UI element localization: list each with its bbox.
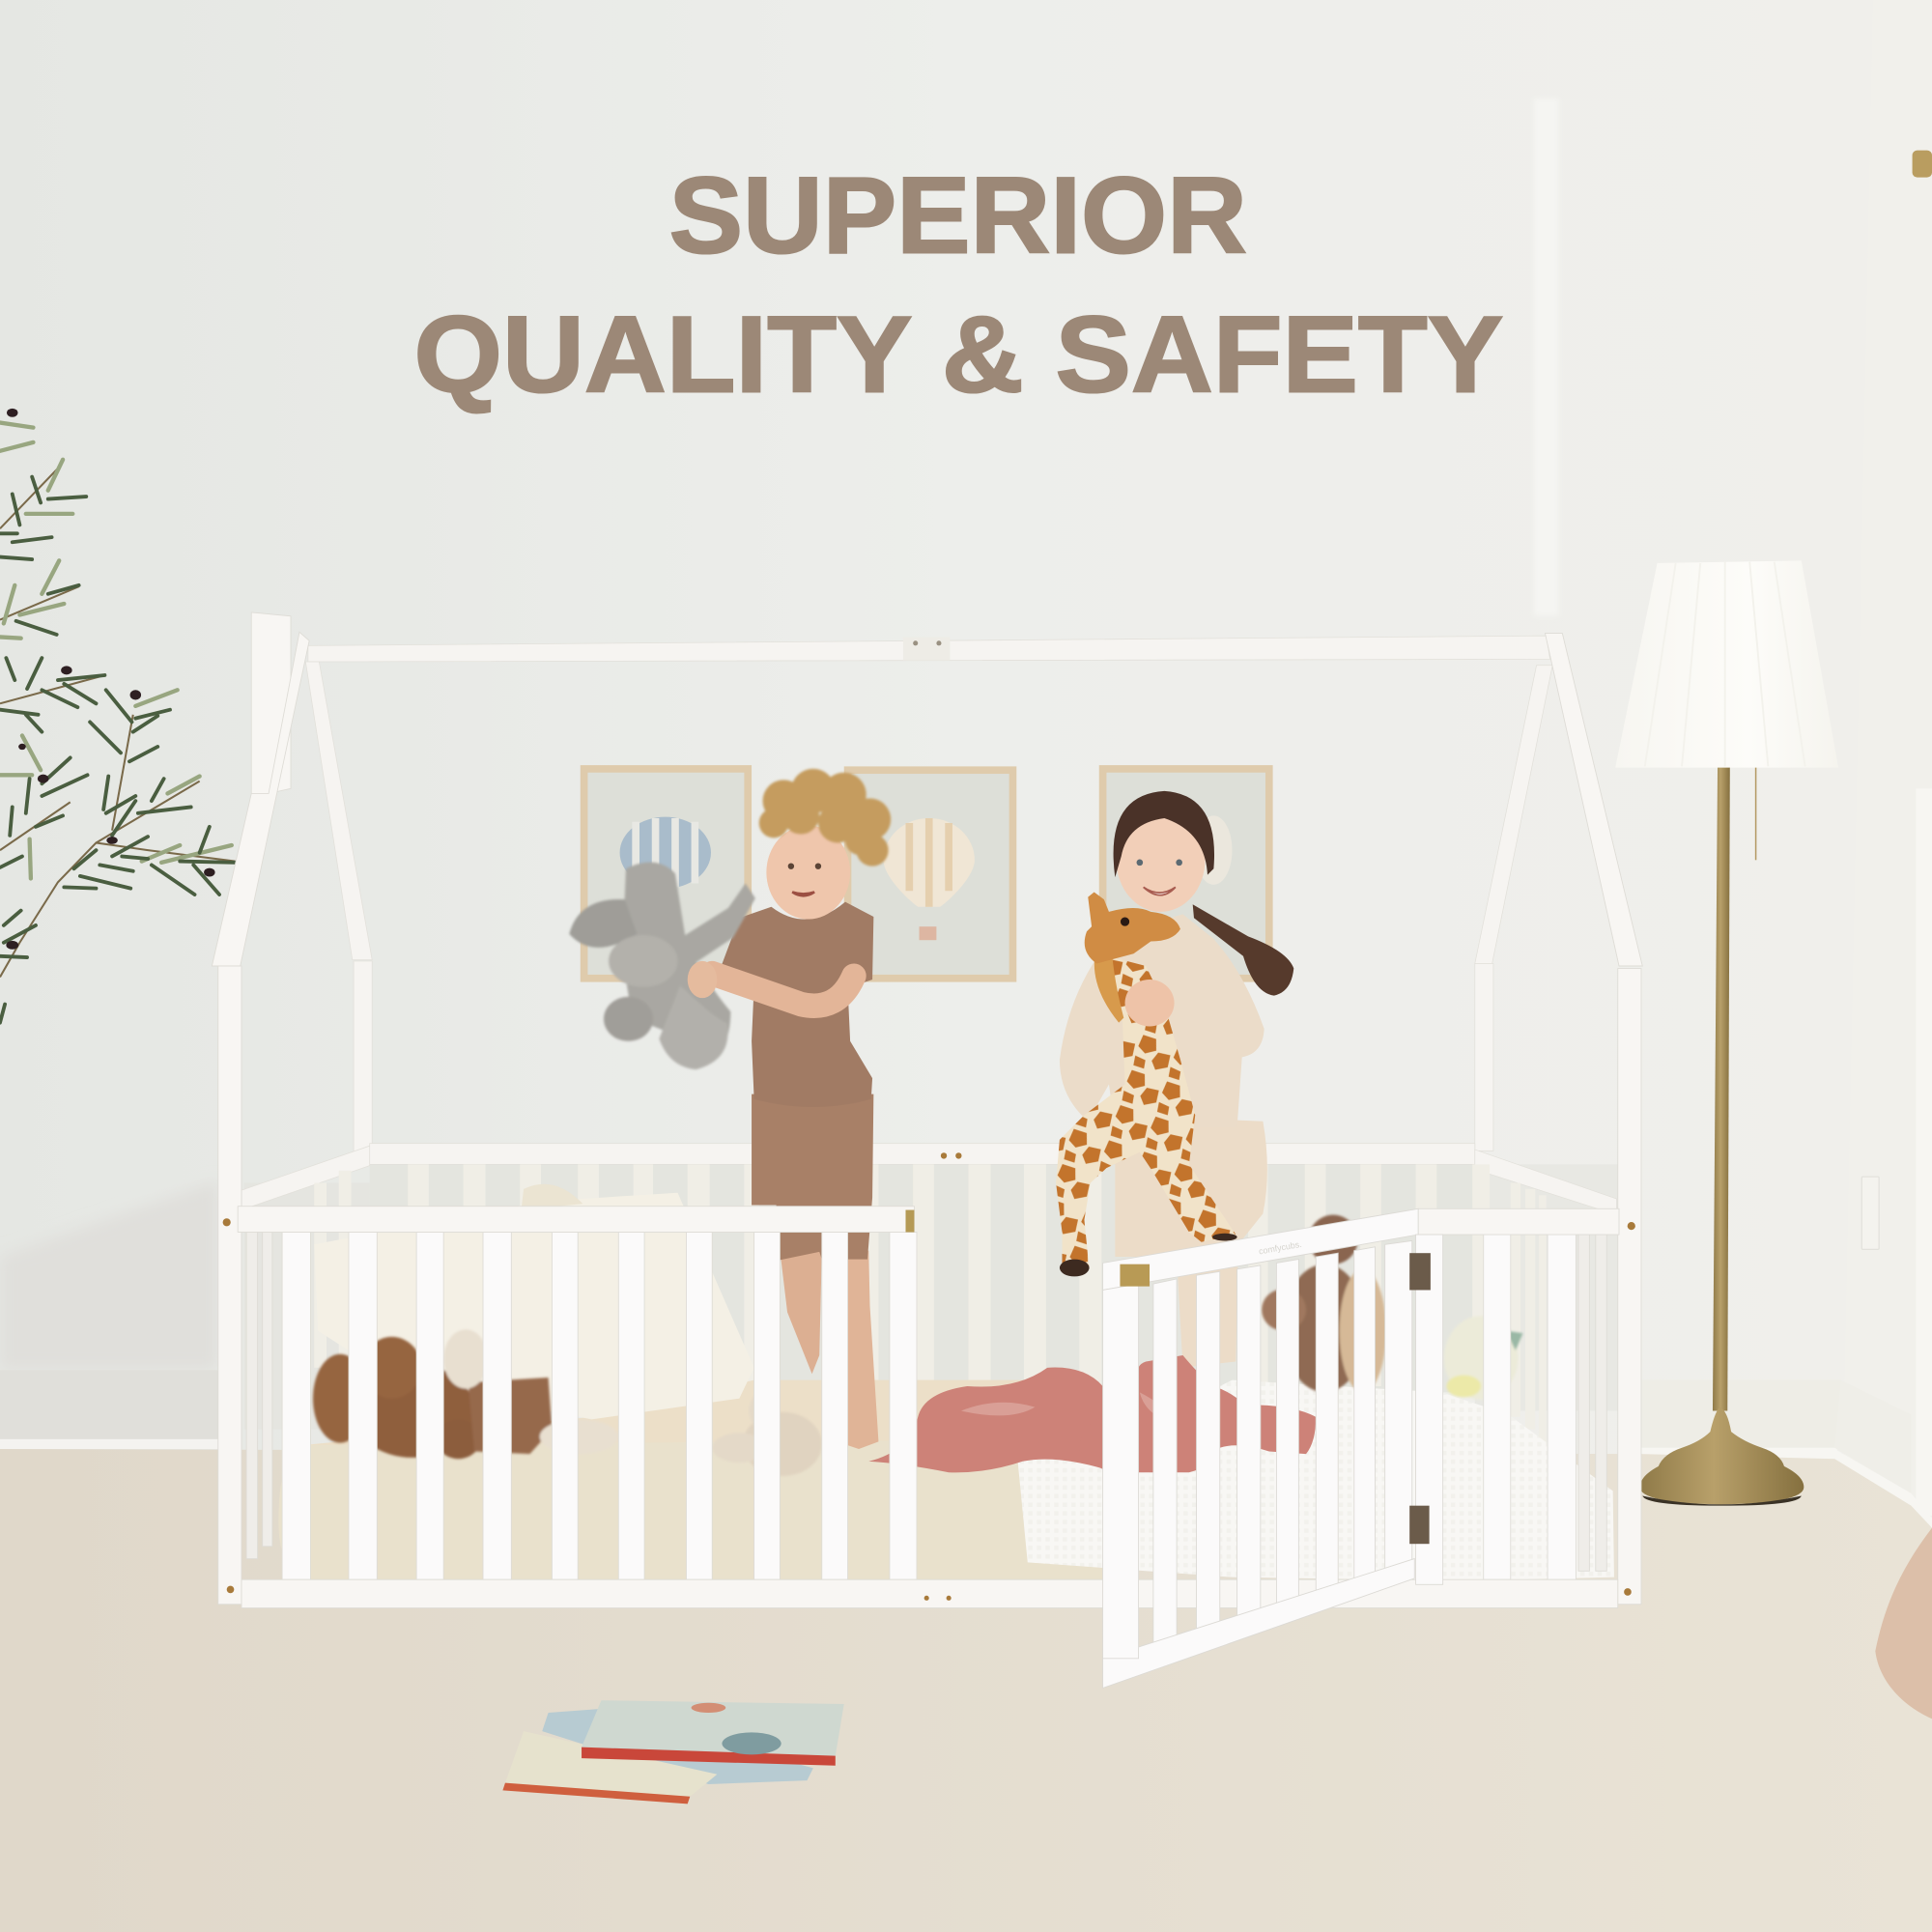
gate latch: [1120, 1264, 1150, 1287]
lamp shade: [1615, 560, 1838, 768]
ridge connector hardware: [903, 637, 950, 661]
boy curly hair: [759, 769, 891, 867]
books on floor: [502, 1700, 844, 1804]
girl: [1060, 791, 1293, 1368]
rail hardware: brass bolts and latches: [223, 640, 1635, 1601]
boy arm: [712, 974, 854, 1006]
girl head: [1117, 809, 1205, 912]
book: top: [582, 1700, 844, 1766]
lamp pull chain: [1755, 766, 1757, 860]
title line 2: QUALITY & SAFETY: [414, 294, 1503, 415]
toy: teddies right: [1262, 1215, 1523, 1400]
throw blanket corner: [1875, 1528, 1932, 1719]
front right post: [1618, 969, 1641, 1605]
ridge beam: [308, 636, 1550, 662]
pillows: [314, 1184, 754, 1419]
gate bottom rail: [1103, 1559, 1414, 1688]
toy: teddy bear left: [313, 1329, 618, 1459]
gate hinge post: [1416, 1235, 1443, 1584]
girl hair: [1114, 791, 1214, 877]
book stack lower: [542, 1709, 813, 1784]
book: lower front: [502, 1731, 717, 1804]
wall background: [0, 0, 1932, 1528]
frame: blue balloon: [581, 765, 752, 982]
front left rafter: [212, 632, 309, 966]
girl sweater: [1060, 914, 1264, 1127]
boy hand on elephant: [688, 961, 717, 998]
lamp pole: [1713, 764, 1730, 1410]
white waffle blanket: [1018, 1380, 1614, 1580]
giraffe head: [1085, 892, 1180, 963]
carpet floor: [0, 1449, 1932, 1932]
frame: third balloon: [1099, 765, 1273, 982]
left side rail: [242, 1146, 370, 1210]
olive plant: [0, 409, 236, 1023]
back left rafter: [305, 662, 372, 960]
floor lamp: [1615, 560, 1838, 1506]
girl hand: [1125, 980, 1175, 1026]
open gate: [1103, 1208, 1443, 1688]
boy shirt: [721, 902, 873, 1107]
wall art frames: [581, 765, 1273, 982]
gate hinges: [1409, 1253, 1431, 1544]
toy: plush bunny: [712, 1391, 822, 1476]
back left post: [354, 961, 372, 1152]
right front top rail: [1418, 1208, 1619, 1235]
back right rafter: [1475, 666, 1552, 963]
wall outlet plate: [1861, 1177, 1879, 1249]
toy: grey elephant: [569, 863, 755, 1069]
gate brand mark: comfycubs.: [1258, 1239, 1302, 1256]
boy shorts: [752, 1094, 873, 1261]
girl pants: [1115, 1115, 1267, 1368]
giraffe mane: [1094, 947, 1123, 1023]
front slats: [282, 1233, 1576, 1579]
mattress: [278, 1380, 1614, 1580]
wall fixture top right: [1913, 151, 1932, 178]
title line 1: SUPERIOR: [669, 154, 1247, 275]
gate slats: [1153, 1240, 1412, 1644]
boy head: [766, 826, 850, 920]
shadow behind back slats: [370, 1164, 1475, 1392]
front left post: [218, 966, 242, 1605]
boy front leg: [822, 1251, 878, 1449]
gate latch post: [1103, 1284, 1139, 1659]
title: [414, 154, 1503, 415]
back right post: [1475, 963, 1493, 1151]
mattress body: [278, 1439, 1109, 1579]
frame: cream balloon: [844, 766, 1016, 982]
front right rafter: [1545, 634, 1642, 966]
giraffe eye: [1121, 917, 1129, 926]
girl ponytail: [1193, 904, 1293, 996]
back slats: [314, 1164, 1547, 1441]
back rail: [370, 1144, 1475, 1164]
girl face features: [1137, 860, 1182, 895]
boy face features: [788, 863, 821, 895]
baseboard: [0, 1370, 1932, 1528]
giraffe hooves: [1060, 1234, 1237, 1276]
right side rail: [1475, 1150, 1616, 1215]
giraffe body: [1056, 956, 1236, 1269]
lamp base: [1640, 1407, 1804, 1506]
boy back leg: [780, 1251, 822, 1374]
sheet on mattress top: [301, 1380, 1084, 1460]
front left vertical extension: [251, 612, 291, 793]
boy: [712, 769, 891, 1449]
toy: giraffe: [1056, 892, 1237, 1276]
front bottom rail: [242, 1579, 1618, 1608]
bed house frame front: [212, 612, 1642, 1608]
pink muslin blanket: [868, 1355, 1316, 1472]
gate top rail: [1103, 1208, 1418, 1290]
bed house frame back: [242, 636, 1618, 1430]
front top rail: [238, 1207, 914, 1233]
left side slats: [246, 1233, 1606, 1571]
